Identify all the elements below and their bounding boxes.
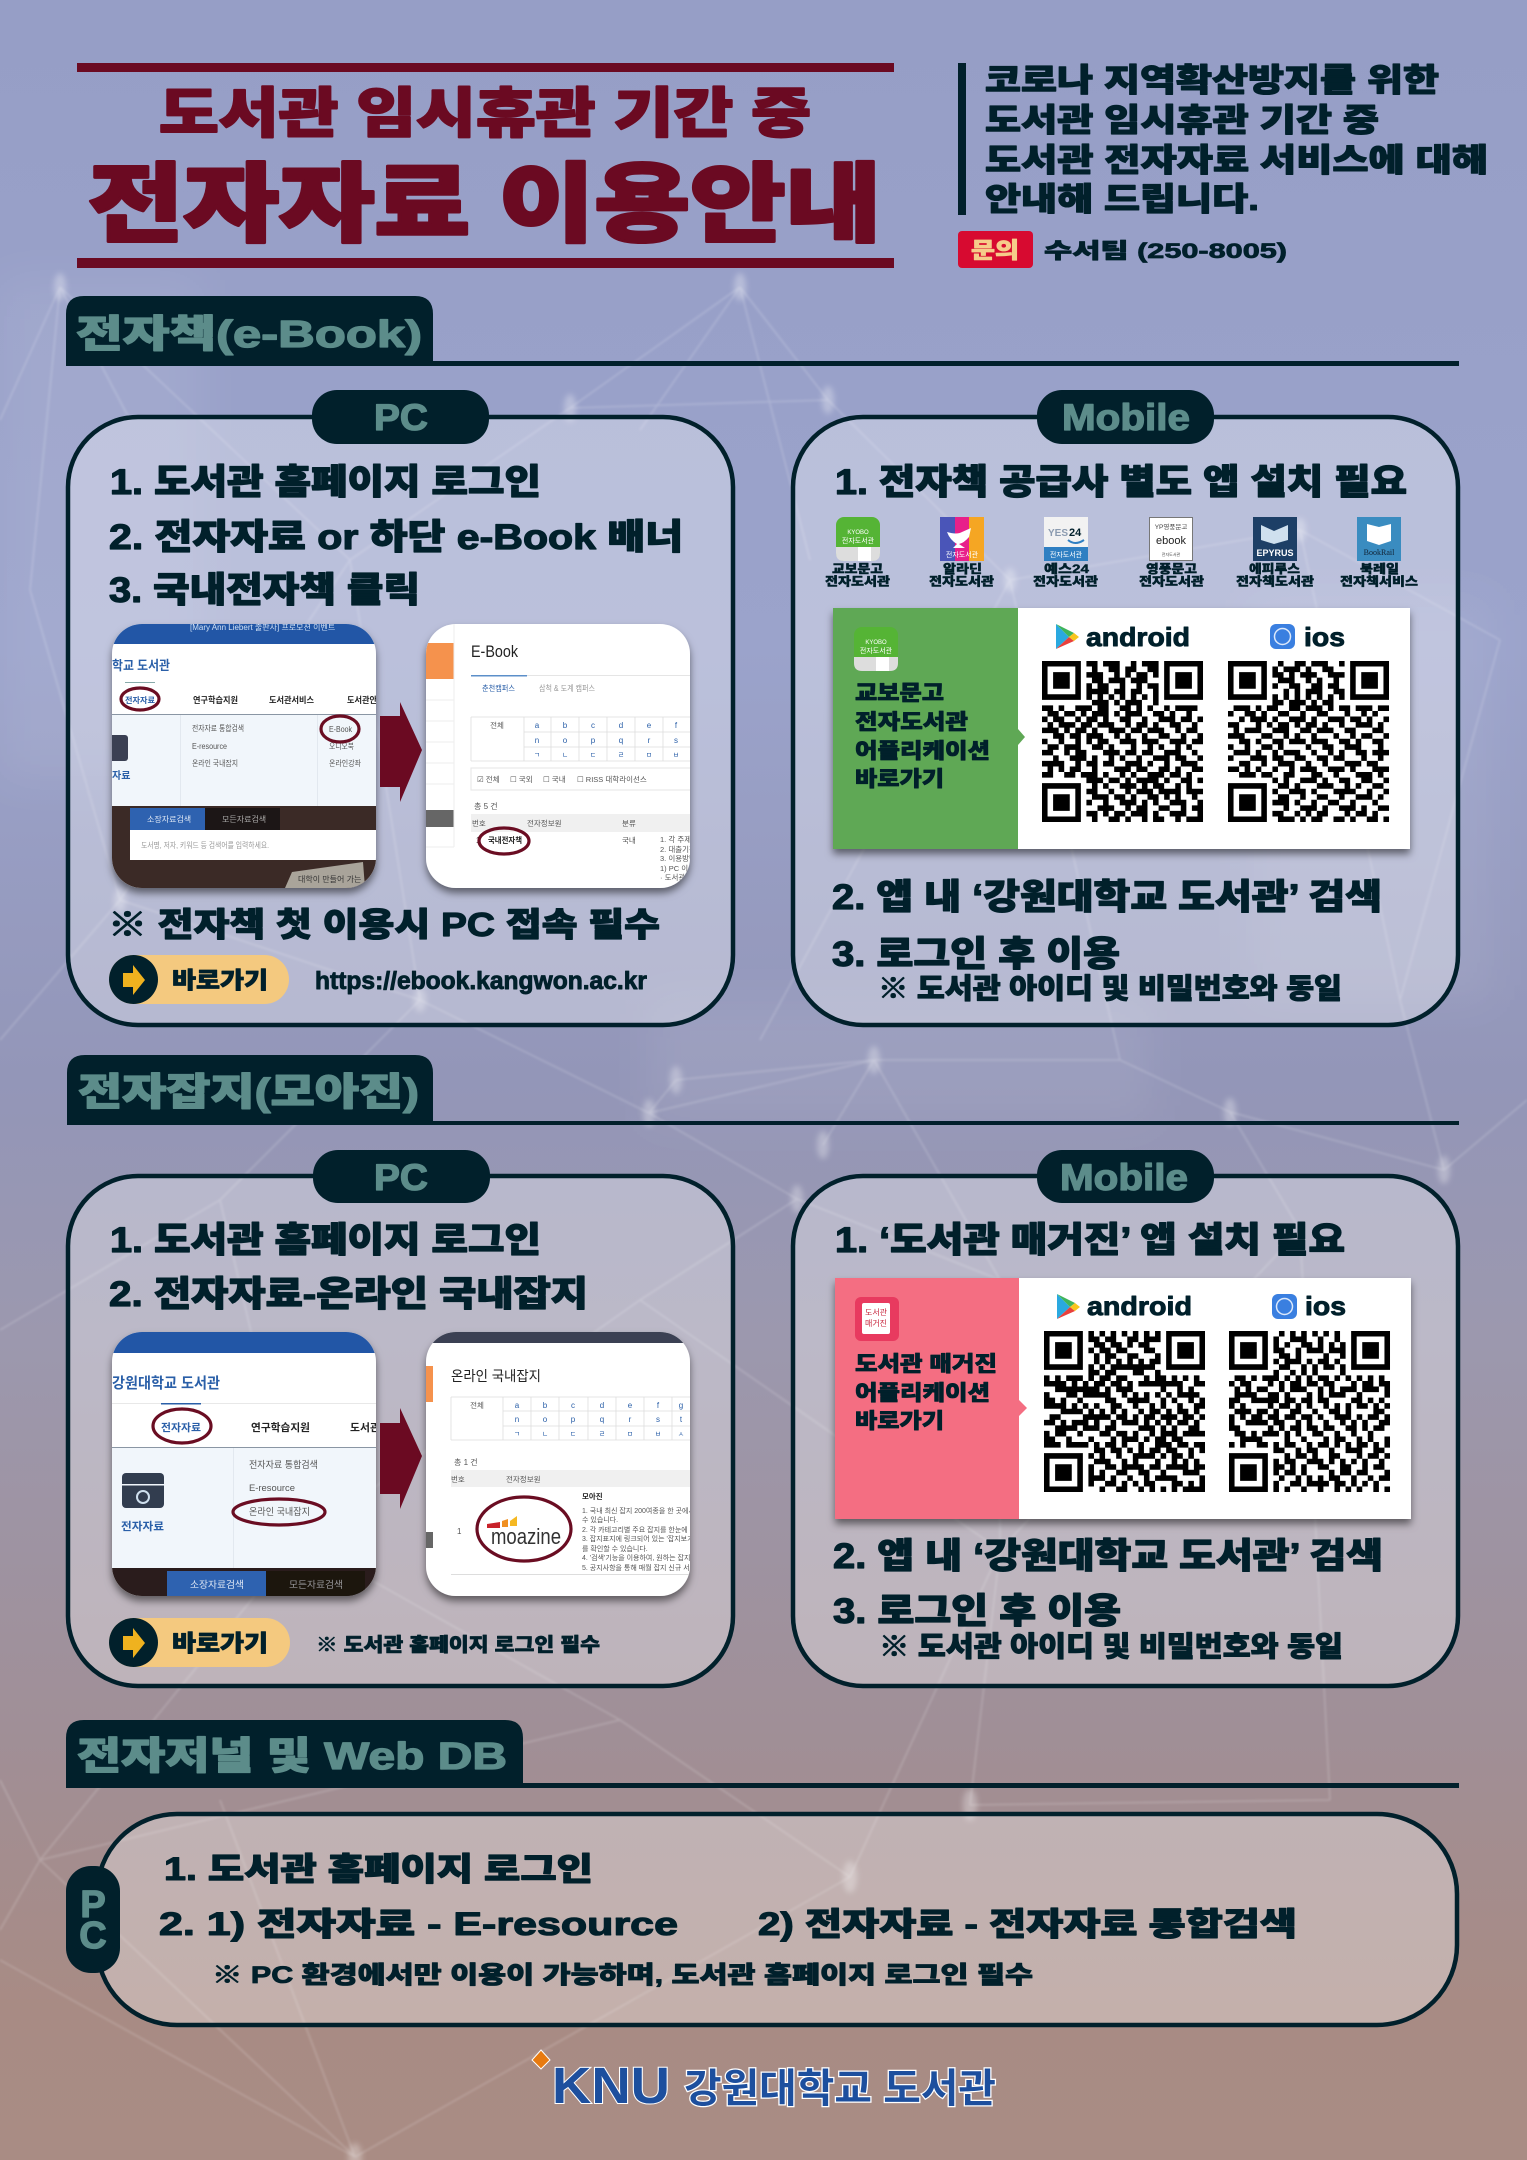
arrow [380,702,422,802]
screenshot: e-book list: ☐ 국내 [543,775,566,784]
icon: yes24 [1044,517,1088,561]
steps [832,878,1382,1004]
icon: magazine app [855,1297,899,1341]
label: aladin [929,561,994,588]
PC vertical pill: P [80,1884,106,1926]
screenshot: magazine list: 2. 각 카테고리별 주요 잡지를 한눈에 확인 [582,1525,703,1534]
screenshot: library menu: 도서관서비스 [269,695,314,705]
screenshot: e-book list: 춘천캠퍼스 [482,683,515,693]
label: yes24: 예스24 [1044,561,1089,576]
icon: magazine app: 매거진 [865,1318,887,1328]
screenshot: magazine list: 수 있습니다. [582,1515,618,1524]
app name: 바로가기 [855,1410,944,1433]
contact: 수서팀 (250-8005) [1044,240,1287,263]
screenshot: library menu: 도서관안 [347,695,377,705]
QR card: kyobo [833,608,1410,849]
icon: kyobo app: 전자도서관 [860,646,893,655]
screenshot: library menu: E-resource [192,742,227,751]
screenshot: magazine list: 온라인 국내잡지 [451,1368,541,1384]
screenshot: magazine list: 모아진 [582,1491,603,1501]
section heading: journal and web DB [66,1720,1459,1788]
steps: 2. 앱 내 ‘강원대학교 도서관’ 검색 [833,1537,1383,1576]
logo: KNU library [532,2050,996,2114]
step 1: 1. 전자책 공급사 별도 앱 설치 필요 [835,463,1407,502]
screenshot: magazine list: 전체 [470,1400,484,1410]
label: aladin: 알라딘 [943,561,982,576]
screenshot: library menu: 자료 [112,770,130,782]
Mobile pill [1037,390,1214,444]
steps: ※ 도서관 아이디 및 비밀번호와 동일 [879,1631,1343,1662]
PC pill: PC [374,1157,428,1198]
label: kyobo: 전자도서관 [825,574,890,588]
screenshot: library menu [112,1332,380,1596]
panel: magazine Mobile [793,1150,1458,1686]
screenshot: e-book list: 삼척 & 도계 캠퍼스 [539,683,595,693]
main title: 전자자료 이용안내 [88,157,881,253]
screenshot: magazine list: 1. 국내 최신 잡지 200여종을 한 곳에서 확인 [582,1506,710,1515]
screenshot: library menu: 도서명, 저자, 키워드 등 검색어를 입력하세요. [141,840,269,850]
icon: kyobo app: KYOBO [865,640,887,646]
step 1: 1. ‘도서관 매거진’ 앱 설치 필요 [835,1221,1345,1260]
steps: 2. 1) 전자자료 - E-resource [159,1906,678,1942]
screenshot: e-book list: 3. 이용방법 [660,853,696,863]
label: yes24 [1033,561,1098,588]
icon: magazine app: 도서관 [865,1307,888,1317]
screenshot: library menu: 대학이 만들어 가는 [298,874,361,884]
intro text block: 도서관 전자자료 서비스에 대해 [985,142,1488,178]
app name: 교보문고 [855,682,944,705]
screenshot: library menu: 전자자료 통합검색 [192,723,244,733]
screenshot: library menu: 연구학습지원 [193,695,238,705]
screenshot: e-book list: 국내 [622,836,636,845]
label: ypbooks [1139,561,1204,588]
screenshot: e-book list: ☑ 전체 [477,774,500,784]
steps: 1. 도서관 홈페이지 로그인 [110,463,541,502]
QR card: magazine [835,1278,1411,1519]
screenshot: e-book list: ☐ RISS 대학라이선스 [577,774,647,784]
intro text block: 안내해 드립니다. [985,181,1259,217]
label: aladin: 전자도서관 [929,574,994,588]
intro text block [958,62,1488,217]
PC pill [313,1150,490,1203]
panel: magazine PC [68,1150,733,1686]
screenshot: magazine list: 번호 [451,1475,465,1484]
screenshot: e-book list [426,624,698,888]
screenshot: e-book list: 전자정보원 [527,818,562,828]
panel: e-Book PC [68,390,733,1025]
icon: yes24: 전자도서관 [1050,550,1083,559]
app name: 어플리케이션 [855,740,990,763]
shortcut button: 바로가기 [172,1630,268,1656]
PC vertical pill: C [79,1915,107,1957]
section heading: magazine [67,1055,1459,1125]
screenshot: magazine list: 전자정보원 [506,1474,541,1484]
steps: 2. 전자자료-온라인 국내잡지 [109,1275,588,1314]
label: epyrus [1236,561,1314,588]
steps: 3. 국내전자책 클릭 [109,571,420,610]
steps [833,1537,1383,1662]
QR: magazine android [1044,1331,1205,1492]
screenshot: library menu: 온라인강좌 [329,758,362,768]
screenshot: e-book list: 총 5 건 [474,801,498,811]
intro text block: 도서관 임시휴관 기간 중 [985,102,1379,138]
ios label: ios [1304,622,1345,652]
steps: 2. 앱 내 ‘강원대학교 도서관’ 검색 [832,878,1382,917]
notice: ※ 전자책 첫 이용시 PC 접속 필수 [108,906,660,943]
screenshot: magazine list: abcdefg [515,1401,683,1410]
app name: 바로가기 [855,768,944,791]
url: https://ebook.kangwon.ac.kr [315,967,647,995]
Mobile pill: Mobile [1060,1157,1188,1198]
screenshot: e-book list: ㄱㄴㄷㄹㅁㅂ [534,752,679,759]
screenshot: magazine list: moazine [491,1524,561,1549]
panel: e-Book Mobile [793,390,1458,1025]
screenshot: magazine list: ㄱㄴㄷㄹㅁㅂㅅ [514,1431,684,1438]
label: bookrail: 전자책서비스 [1340,574,1418,588]
logo: KNU library: KNU [552,2057,670,2114]
screenshot: library menu [100,622,377,888]
steps: 1. 도서관 홈페이지 로그인 [110,1221,541,1260]
icon: epyrus: EPYRUS [1256,548,1294,558]
ios label [1272,1291,1346,1321]
screenshot: e-book list: 분류 [622,819,636,828]
label: epyrus: 에피루스 [1249,561,1300,576]
steps: 3. 로그인 후 이용 [833,1592,1121,1631]
screenshot: magazine list: 1 [457,1527,462,1536]
QR: kyobo ios [1228,661,1389,822]
screenshot: library menu: 전자자료 [125,695,156,705]
label: ypbooks: 전자도서관 [1139,574,1204,588]
screenshot: magazine list: nopqrst [515,1415,683,1424]
screenshot: e-book list: 1. 각 주제별 [660,834,698,844]
screenshot: library menu: 전자자료 [161,1422,201,1434]
screenshot: magazine list [426,1332,710,1596]
shortcut button: 바로가기 [172,967,268,993]
screenshot: library menu: 도서관 [350,1421,380,1434]
PC vertical pill [66,1866,120,1973]
steps: 2) 전자자료 - 전자자료 통합검색 [758,1906,1297,1942]
arrow [380,1408,422,1509]
screenshot: e-book list: 1 [476,836,481,845]
label: kyobo [825,562,890,588]
steps [159,1851,1297,1989]
shortcut button [109,1618,290,1667]
shortcut button [109,955,289,1004]
logo: KNU library: 강원대학교 도서관 [684,2067,996,2111]
Mobile pill: Mobile [1062,397,1190,438]
steps: 2. 전자자료 or 하단 e-Book 배너 [109,518,683,557]
steps: 3. 로그인 후 이용 [832,935,1120,974]
contact: 문의 [971,238,1019,263]
section heading: e-Book: 전자책(e-Book) [76,314,422,356]
screenshot: library menu: 소장자료검색 [147,814,191,824]
icon: kyobo: 전자도서관 [842,536,875,545]
screenshot: magazine list: 4. '검색'기능을 이용하여, 원하는 잡지 / 기사 [582,1553,710,1562]
screenshot: magazine list: 를 확인할 수 있습니다. [582,1544,648,1553]
screenshot: e-book list: 1) PC 이용 [660,863,695,873]
screenshot: e-book list: 번호 [472,819,486,828]
icon: bookrail: BookRail [1364,548,1395,557]
QR: magazine ios [1229,1331,1390,1492]
icon: kyobo: KYOBO [847,530,869,536]
screenshot: e-book list: 국내전자책 [488,835,522,845]
steps [109,1221,588,1314]
section heading: e-Book [66,296,1459,366]
PC pill [312,390,489,444]
screenshot: library menu: 강원대학교 도서관 [112,1375,220,1392]
screenshot: e-book list: 전체 [490,720,504,730]
screenshot: e-book list: ☐ 국외 [510,774,533,784]
icon: ypbooks: YP영풍문고 [1155,522,1187,531]
icon: kyobo app [854,627,898,671]
PC pill: PC [374,397,428,438]
icon: bookrail [1357,517,1401,561]
section heading: journal and web DB: 전자저널 및 Web DB [77,1736,507,1778]
icon: ypbooks: 전자도서관 [1162,551,1181,557]
panel: journal PC [66,1814,1457,2025]
label: ypbooks: 영풍문고 [1146,561,1197,576]
icon: yes24: 24 [1069,527,1082,539]
steps: ※ PC 환경에서만 이용이 가능하며, 도서관 홈페이지 로그인 필수 [212,1962,1033,1989]
screenshot: magazine list: 3. 잡지표지에 링크되어 있는 '잡지보기'를 [582,1534,702,1543]
app name: 어플리케이션 [855,1382,990,1405]
app name: 도서관 매거진 [855,1353,997,1376]
screenshot: library menu: 연구학습지원 [251,1421,310,1434]
label: epyrus: 전자책도서관 [1236,574,1314,588]
login note: ※ 도서관 홈페이지 로그인 필수 [316,1634,600,1656]
screenshot: e-book list: E-Book [471,642,518,661]
android label: android [1087,1291,1192,1321]
screenshot: library menu: 오디오북 [329,742,354,751]
subtitle: 도서관 임시휴관 기간 중 [159,84,811,144]
steps: 1. 도서관 홈페이지 로그인 [164,1851,593,1887]
ios label [1270,622,1345,652]
label: yes24: 전자도서관 [1033,574,1098,588]
intro text block: 코로나 지역확산방지를 위한 [985,62,1439,98]
screenshot: library menu: 전자자료 통합검색 [249,1459,318,1471]
icon: aladin: 전자도서관 [946,550,979,559]
screenshot: magazine list: 5. 공지사항을 통해 매월 잡지 신규 서비스 [582,1563,703,1572]
icon: ypbooks: ebook [1156,535,1186,547]
ios label: ios [1305,1291,1346,1321]
title block [77,63,894,268]
contact [958,231,1287,268]
screenshot: library menu: E-Book [329,725,353,734]
icon: epyrus [1253,517,1297,561]
screenshot: library menu: 모든자료검색 [289,1579,343,1591]
Mobile pill [1037,1150,1214,1203]
label: bookrail [1340,561,1418,588]
app name: 전자도서관 [855,711,968,734]
screenshot: magazine list: 총 1 건 [454,1457,478,1467]
icon: ypbooks [1150,518,1192,560]
screenshot: library menu: E-resource [249,1483,295,1494]
icon: aladin [940,517,984,561]
screenshot: library menu: 온라인 국내잡지 [192,758,238,768]
screenshot: library menu: 온라인 국내잡지 [249,1506,310,1518]
label: bookrail: 북레일 [1360,561,1399,576]
android label: android [1086,622,1190,652]
screenshot: e-book list: 2. 대출기간 [660,844,696,854]
screenshot: library menu: 소장자료검색 [190,1579,244,1591]
label: kyobo: 교보문고 [832,562,883,576]
icon: kyobo [836,517,880,561]
steps: ※ 도서관 아이디 및 비밀번호와 동일 [878,973,1342,1004]
app name [855,1353,997,1433]
steps [109,463,683,610]
screenshot: library menu: [Mary Ann Liebert 출판사] 프로모션 이벤트 [190,622,335,632]
screenshot: e-book list: abcdef [535,721,678,730]
QR: kyobo android [1042,661,1203,822]
screenshot: library menu: 학교 도서관 [112,658,170,673]
icon: yes24: YES [1048,528,1068,539]
section heading: magazine: 전자잡지(모아진) [78,1072,419,1114]
screenshot: library menu: 모든자료검색 [222,814,266,824]
app name [855,682,990,791]
screenshot: library menu: 전자자료 [121,1520,164,1533]
screenshot: e-book list: nopqrs [535,736,678,745]
screenshot: e-book list: · 도서관 [660,872,685,882]
